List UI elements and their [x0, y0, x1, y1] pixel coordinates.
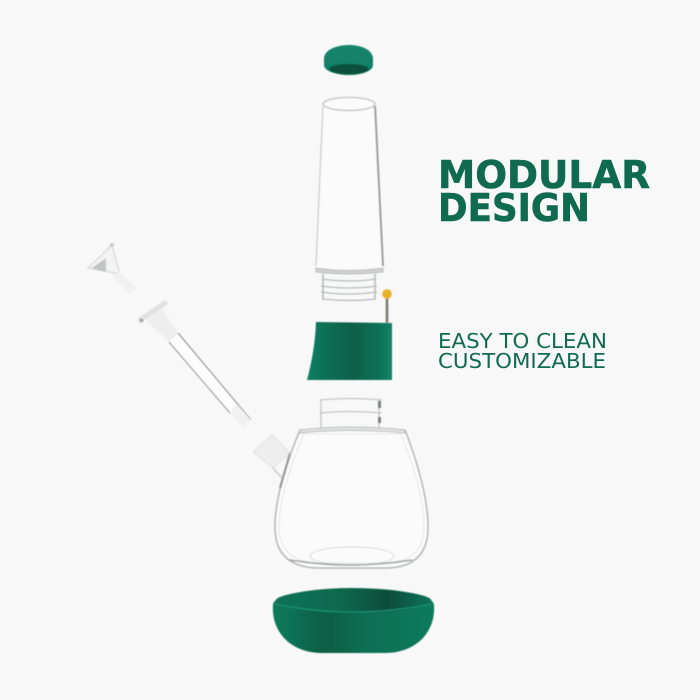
green collar	[307, 322, 392, 380]
title: DESIGN	[438, 186, 590, 230]
glass side joint	[253, 435, 290, 488]
glass downstem	[140, 303, 251, 428]
title	[438, 153, 650, 230]
feature list text: CUSTOMIZABLE	[438, 349, 606, 373]
title: MODULAR	[438, 153, 650, 197]
icon: yellow pin	[382, 289, 392, 323]
threaded neck	[321, 274, 377, 300]
threaded base neck	[320, 398, 382, 428]
glass base with neck	[275, 398, 428, 568]
glass bowl piece	[88, 243, 137, 294]
feature list text: EASY TO CLEAN	[438, 329, 607, 353]
green silicone bowl	[273, 588, 434, 653]
glass top tube	[316, 98, 383, 300]
feature list text	[438, 329, 607, 373]
icon: green top cap	[324, 45, 373, 75]
